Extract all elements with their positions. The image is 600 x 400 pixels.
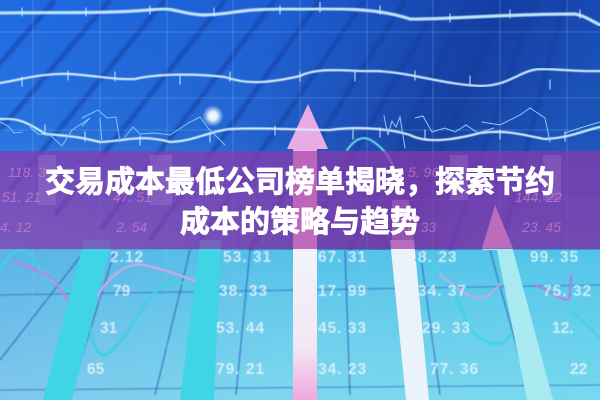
pink arrow shapes in band [293, 151, 513, 249]
table numbers: 29. 33 [422, 320, 471, 337]
faded numbers in band: 144. 22 [515, 189, 562, 205]
table numbers: 53. 31 [223, 249, 272, 266]
faded numbers in band: 23. 45 [521, 219, 561, 235]
table numbers: 65 [87, 361, 105, 378]
table numbers: 2.12 [110, 249, 144, 266]
cyan slanted bars [43, 240, 221, 400]
banner band [0, 151, 600, 249]
cyan and pink curves [0, 250, 600, 355]
table numbers: 77. 36 [430, 361, 479, 378]
table numbers: 38. 33 [219, 283, 268, 300]
faded numbers in band: 1. 33 [405, 219, 436, 235]
faded numbers in band: 51. 21 [2, 189, 41, 205]
faded numbers in band: 4. 12 [0, 219, 31, 235]
table numbers: 34. 23 [318, 361, 367, 378]
faded numbers in band: 2. 54 [115, 219, 147, 235]
table numbers: 75. 32 [543, 283, 592, 300]
table numbers: 34. 37 [418, 283, 467, 300]
table numbers: 31 [100, 320, 118, 337]
line charts [0, 2, 600, 180]
upward arrows [287, 104, 553, 400]
faint columns in band [38, 155, 561, 205]
table numbers: 22 [570, 361, 587, 378]
table numbers: 79. 21 [216, 361, 265, 378]
faded numbers in band [0, 164, 562, 235]
table numbers: 67. 31 [318, 249, 367, 266]
faded numbers in band: 118. 3 [8, 164, 46, 180]
perspective dark stripes [0, 0, 565, 250]
faded numbers in band: 5. 96 [408, 164, 439, 180]
table numbers: 53. 44 [216, 320, 265, 337]
table numbers [87, 249, 592, 378]
faded numbers in band: 47. 51 [113, 189, 152, 205]
glow point [202, 105, 224, 127]
table numbers: 45. 33 [318, 320, 367, 337]
banner title [45, 166, 555, 239]
banner title: 成本的策略与趋势 [180, 206, 420, 239]
table numbers: 8. 23 [418, 249, 457, 266]
table numbers: 17. 99 [318, 283, 367, 300]
table numbers: 79 [113, 283, 131, 300]
banner title: 交易成本最低公司榜单揭晓，探索节约 [45, 166, 555, 199]
table numbers: 12. [552, 320, 574, 337]
table numbers: 99. 35 [530, 249, 579, 266]
